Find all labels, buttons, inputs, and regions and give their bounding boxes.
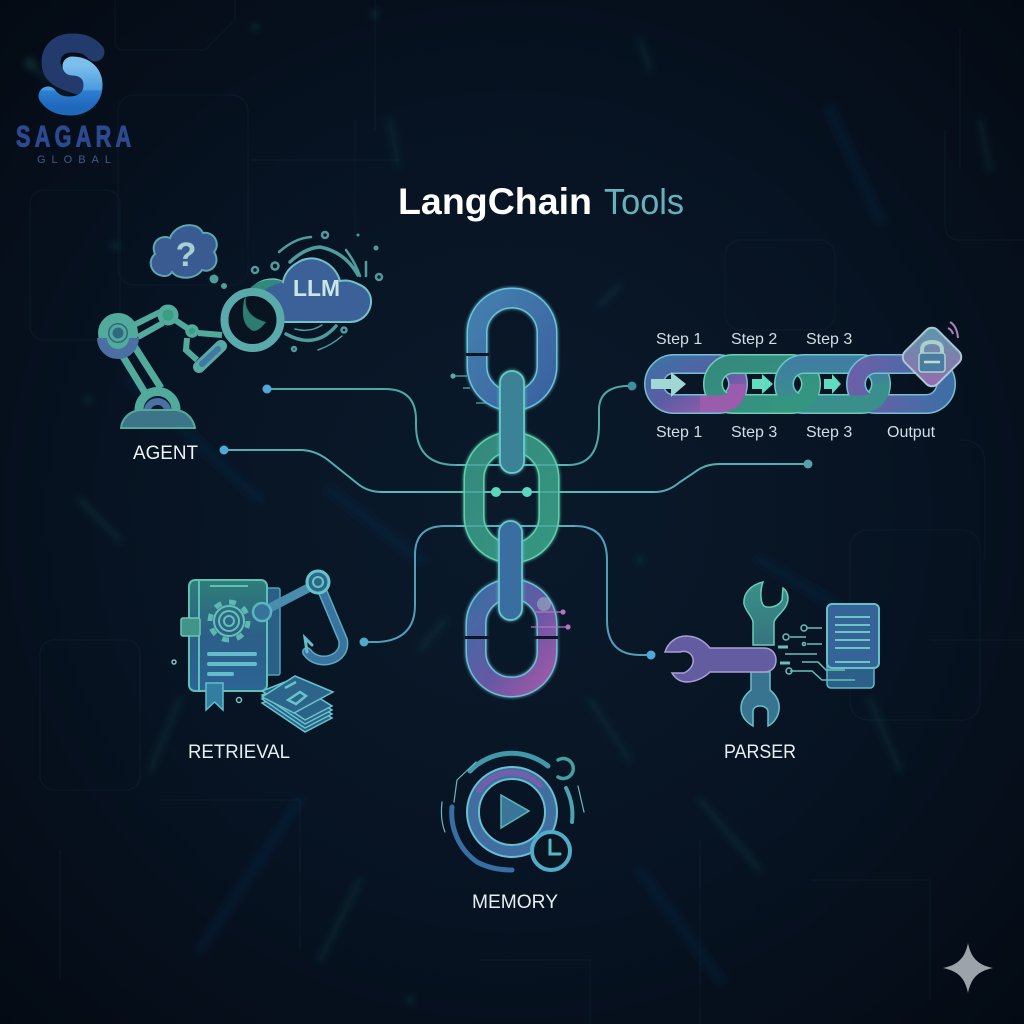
hook arm [253, 571, 343, 661]
thought cloud with question mark [151, 225, 227, 289]
robot arm [102, 307, 222, 428]
outer arcs [470, 753, 548, 771]
top wrench [744, 582, 788, 645]
clock [532, 832, 570, 870]
icon: sparkle watermark [943, 943, 993, 993]
step labels bottom: Step 3 [731, 424, 777, 441]
icon: agent robot arm with magnifier [102, 225, 382, 428]
connector lines over green link [380, 465, 655, 526]
lower connecting link [499, 521, 522, 620]
step labels bottom [656, 424, 936, 441]
icon: retrieval book with hook [172, 571, 343, 732]
green middle chain link [474, 442, 549, 553]
connector: agent to chain [267, 386, 636, 465]
upper connecting link [500, 371, 524, 473]
highlight on bottom link [537, 597, 551, 611]
step labels top: Step 2 [731, 331, 777, 348]
link 2 [713, 364, 811, 404]
logo wordmark: SAGARA [16, 119, 135, 153]
bookmark [206, 683, 223, 710]
logo: Sagara Global [16, 43, 135, 166]
link 1 [654, 364, 738, 404]
step labels top: Step 1 [656, 331, 702, 348]
thought cloud with question mark: ? [176, 236, 196, 274]
LLM cloud [244, 258, 371, 322]
horizontal chain links [654, 364, 946, 404]
data flow lines [778, 625, 855, 680]
book clasp [181, 618, 200, 636]
bottom chain link [465, 589, 558, 687]
main ring [473, 773, 551, 851]
back document [827, 660, 874, 688]
step labels bottom: Step 1 [656, 424, 702, 441]
magnifier [199, 292, 280, 367]
step labels bottom: Output [887, 424, 936, 441]
small speck marks [172, 660, 242, 702]
play triangle [501, 795, 529, 828]
label: agent: AGENT [133, 443, 198, 464]
icon: parser wrenches and document [665, 582, 879, 726]
link 3 overlap [842, 384, 881, 404]
step labels top: Step 3 [806, 331, 852, 348]
front document [827, 604, 879, 668]
icon: memory play ring with clock [441, 753, 584, 870]
connector lines [220, 382, 812, 660]
centre dots [491, 487, 532, 497]
connector dots [220, 382, 812, 660]
link 1 overlap [700, 384, 738, 404]
arrows in links [651, 372, 841, 397]
link 3 [784, 364, 881, 404]
connector: retrieval to parser [364, 526, 651, 655]
document text lines [835, 617, 870, 662]
label: retrieval: RETRIEVAL [188, 742, 290, 763]
connector: agent label to output [224, 450, 808, 492]
book text lines [209, 654, 255, 674]
label: parser: PARSER [724, 742, 796, 763]
top chain link [466, 298, 547, 401]
book back pages [266, 588, 280, 675]
link 4 [856, 364, 946, 404]
logo tagline: GLOBAL [37, 154, 111, 166]
title: LangChain [398, 181, 592, 222]
book cover [189, 580, 267, 691]
central chain [380, 298, 655, 687]
small circuit ticks on bottom link [531, 610, 570, 629]
logo mark [48, 43, 95, 106]
stacked papers [262, 676, 333, 732]
small circuit ticks on top link [451, 374, 486, 403]
padlock diamond [899, 322, 965, 390]
bottom wrench [741, 672, 779, 726]
LLM cloud: LLM [293, 275, 340, 301]
horizontal wrench [665, 636, 776, 682]
title [398, 181, 684, 222]
gear [210, 602, 248, 640]
cloud signal arcs [252, 232, 382, 351]
label: memory: MEMORY [472, 892, 558, 913]
panel: chain steps [651, 322, 965, 441]
title: Tools [604, 181, 684, 222]
book spine line [199, 581, 248, 690]
link 2 overlap [772, 384, 811, 404]
step labels bottom: Step 3 [806, 424, 852, 441]
step labels top [656, 331, 852, 348]
